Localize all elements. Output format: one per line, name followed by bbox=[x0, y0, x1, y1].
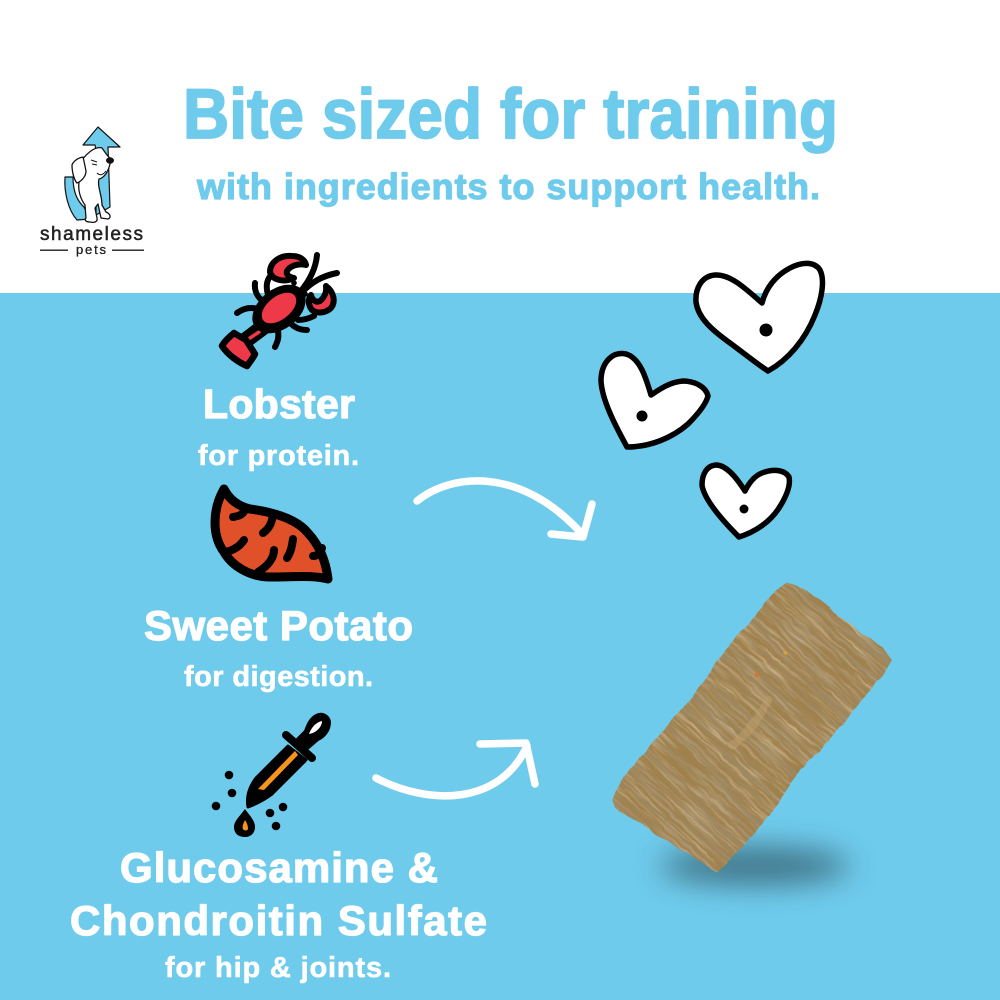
icon: sweet potato bbox=[215, 489, 328, 579]
subtitle: with ingredients to support health. bbox=[196, 166, 820, 207]
label: for hip and joints: for hip & joints. bbox=[165, 952, 391, 984]
shadow under treat bbox=[660, 847, 850, 885]
label: lobster: Lobster bbox=[203, 381, 355, 427]
icon: left heart bbox=[601, 354, 708, 447]
wordmark: pets: pets bbox=[76, 242, 106, 257]
label: for protein: for protein. bbox=[198, 440, 359, 472]
icon: lobster bbox=[222, 255, 337, 366]
logo: shameless pets bbox=[40, 127, 144, 257]
icon: dropper bbox=[212, 714, 330, 837]
label: sweet potato: Sweet Potato bbox=[144, 602, 413, 649]
icon: cartoon dog bbox=[72, 148, 110, 222]
arrow: lower bbox=[376, 743, 535, 796]
icon: small heart bbox=[702, 465, 789, 537]
icon: dog nose bbox=[106, 157, 114, 164]
label: glucosamine and: Glucosamine & bbox=[120, 844, 438, 891]
icon: blue arrow and U behind dog bbox=[65, 127, 120, 220]
background panel: blue lower section bbox=[0, 293, 1000, 1000]
label: chondroitin sulfate: Chondroitin Sulfate bbox=[70, 897, 487, 944]
photo: jerky treat bbox=[612, 582, 892, 872]
wordmark: shameless: shameless bbox=[40, 224, 143, 245]
icon: large heart bbox=[696, 263, 822, 371]
arrow: upper bbox=[417, 481, 592, 537]
title: Bite sized for training bbox=[183, 75, 838, 154]
label: for digestion: for digestion. bbox=[184, 661, 373, 693]
